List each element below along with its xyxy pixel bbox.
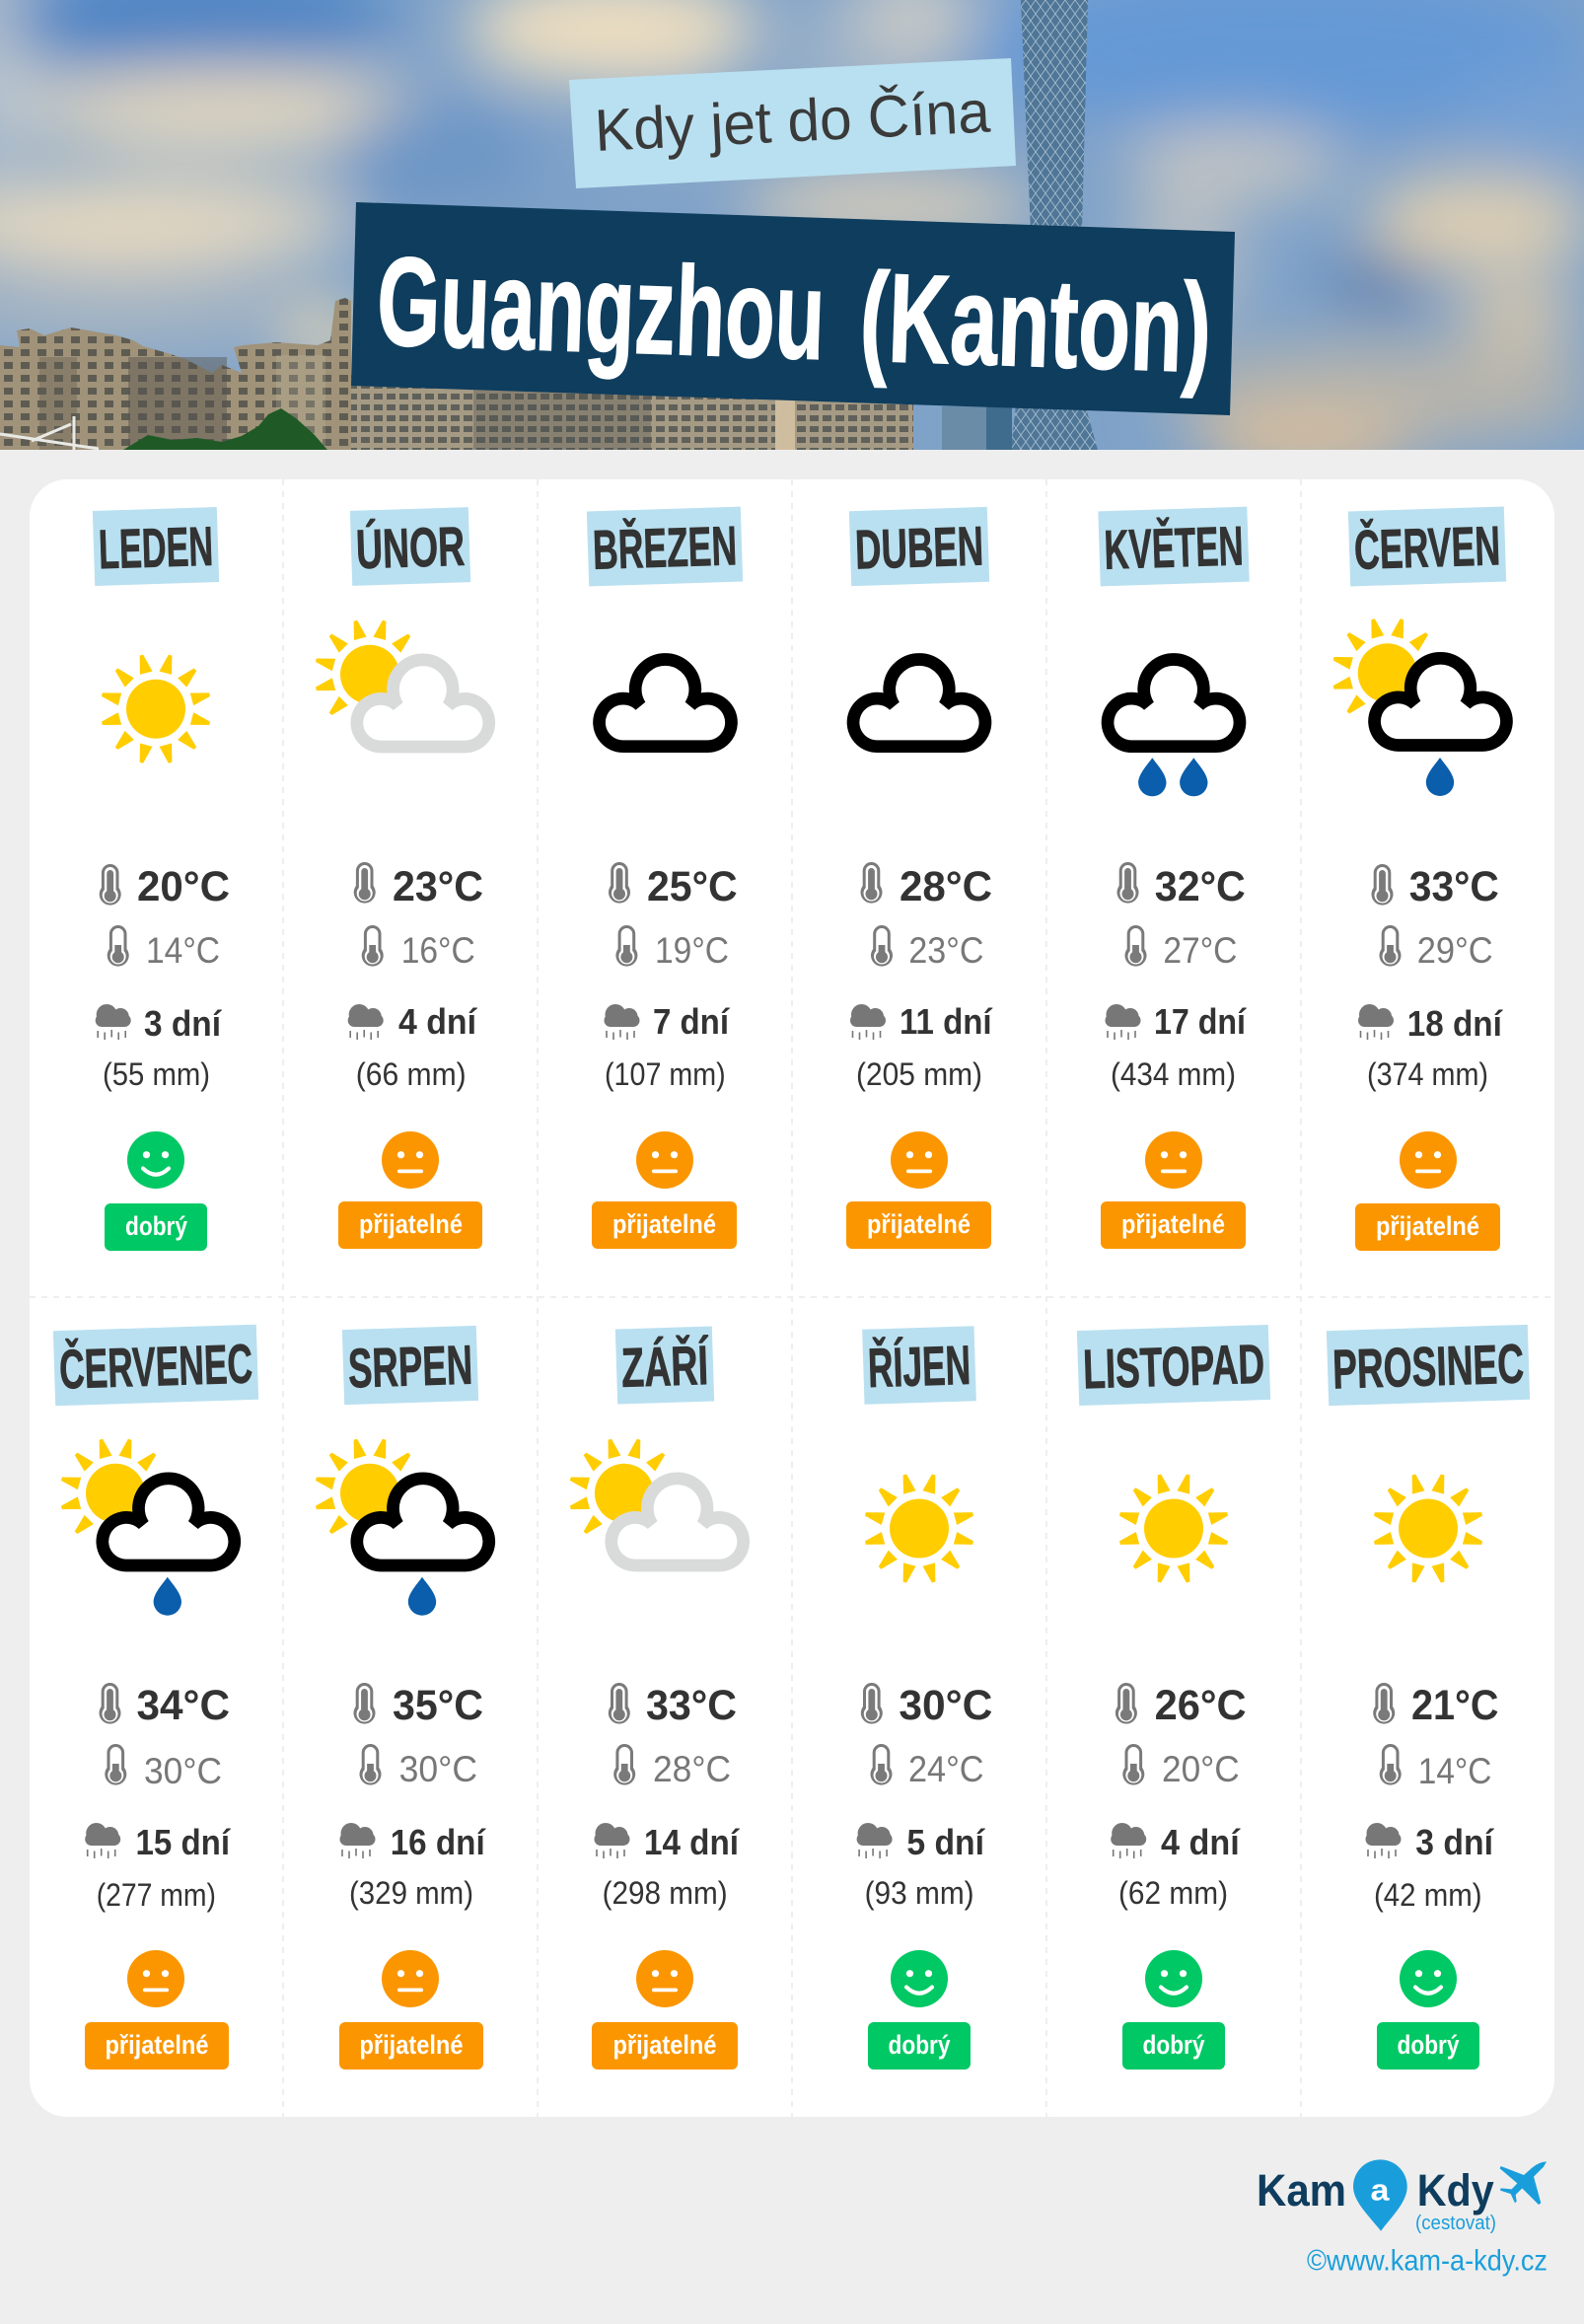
badge: přijatelné: přijatelné <box>359 1209 463 1239</box>
icon: sun, black cloud and drop <box>60 1438 235 1616</box>
heading: LEDEN <box>93 507 219 586</box>
icon: sun <box>101 653 211 764</box>
icon: sun <box>1118 1473 1229 1584</box>
rain days: 7 dní <box>653 1001 730 1042</box>
panel: listopad <box>1077 1325 1270 2070</box>
rainfall: (42 mm) <box>1374 1877 1481 1913</box>
rainfall: (66 mm) <box>356 1056 467 1092</box>
low temperature <box>615 925 729 971</box>
high temperature: 21°C <box>1411 1682 1498 1729</box>
panel: červenec <box>53 1325 258 2070</box>
subtitle: Kdy jet do Čína: Kdy jet do Čína <box>593 78 992 164</box>
rainfall: (298 mm) <box>603 1875 728 1911</box>
low temperature <box>1122 1744 1240 1789</box>
badge: dobrý <box>105 1203 207 1251</box>
badge: dobrý <box>868 2022 971 2070</box>
icon: smiley neutral <box>382 1131 439 1189</box>
high temperature: 33°C <box>1409 863 1499 910</box>
rain days <box>1365 1822 1494 1862</box>
badge: dobrý: dobrý <box>1397 2030 1460 2060</box>
icon: black cloud with two drops <box>1108 660 1240 796</box>
icon: smiley neutral <box>127 1950 184 2007</box>
high temperature <box>1116 1682 1247 1729</box>
tagline: (cestovat) <box>1415 2213 1496 2234</box>
rain days: 4 dní <box>1161 1822 1241 1862</box>
panel: říjen <box>857 1326 992 2070</box>
low temperature <box>1379 925 1493 971</box>
icon: smiley neutral <box>382 1950 439 2007</box>
low temperature: 14°C <box>146 930 220 971</box>
low temperature: 24°C <box>908 1749 984 1789</box>
icon: smiley good <box>127 1131 184 1189</box>
rain days <box>1358 1003 1503 1044</box>
rain days <box>857 1822 985 1862</box>
badge: přijatelné <box>1101 1201 1246 1249</box>
heading: ČERVENEC <box>53 1325 258 1406</box>
heading: ČERVEN <box>1348 507 1506 586</box>
badge: přijatelné <box>85 2022 229 2070</box>
panel: leden <box>93 507 230 1251</box>
rain days: 17 dní <box>1154 1001 1247 1042</box>
badge: přijatelné <box>592 2022 738 2070</box>
low temperature: 30°C <box>144 1751 222 1791</box>
high temperature <box>353 1682 483 1729</box>
heading: LISTOPAD <box>1077 1325 1270 1406</box>
icon: map pin <box>1353 2159 1407 2231</box>
rainfall: (62 mm) <box>1118 1875 1228 1911</box>
tower <box>1021 0 1088 232</box>
rain days: 5 dní <box>906 1822 985 1862</box>
panel: březen <box>587 507 743 1249</box>
heading: SRPEN <box>342 1326 478 1405</box>
high temperature <box>1371 863 1499 910</box>
poles <box>0 416 99 450</box>
icon: smiley good <box>1145 1950 1202 2007</box>
icon: sun, black cloud and drop <box>315 1438 489 1616</box>
panel: srpen <box>315 1326 489 2070</box>
rain days <box>339 1822 486 1862</box>
rain days <box>348 1001 477 1042</box>
rain days <box>594 1822 740 1862</box>
icon: smiley neutral <box>636 1131 693 1189</box>
heading: PROSINEC <box>1327 1325 1530 1406</box>
low temperature: 14°C <box>1418 1751 1491 1791</box>
low temperature <box>108 925 220 971</box>
heading: SRPEN: SRPEN <box>347 1334 473 1399</box>
title: Guangzhou (Kanton): Guangzhou <box>375 231 828 387</box>
heading: ČERVENEC: ČERVENEC <box>58 1332 253 1401</box>
high temperature: 20°C <box>137 863 230 910</box>
icon: smiley neutral <box>891 1131 948 1189</box>
icon: sun, black cloud and drop <box>1332 617 1506 796</box>
wordmark: Kdy: Kdy <box>1417 2165 1494 2215</box>
rainfall: (107 mm) <box>605 1056 726 1092</box>
badge: přijatelné: přijatelné <box>867 1209 971 1239</box>
heading: BŘEZEN: BŘEZEN <box>592 514 738 581</box>
panel: září <box>569 1326 744 2070</box>
heading: LISTOPAD: LISTOPAD <box>1082 1333 1265 1400</box>
panel: únor <box>315 507 489 1249</box>
trees <box>123 408 327 450</box>
low temperature: 29°C <box>1417 930 1493 971</box>
panel: duben <box>846 507 993 1249</box>
badge: přijatelné: přijatelné <box>612 1209 716 1239</box>
high temperature <box>100 863 230 910</box>
rain days <box>604 1001 730 1042</box>
low temperature <box>362 925 475 971</box>
rain days <box>850 1001 993 1042</box>
low temperature: 30°C <box>399 1749 477 1789</box>
high temperature <box>1373 1682 1498 1729</box>
panel: červen <box>1332 507 1506 1251</box>
rain days: 3 dní <box>144 1003 222 1044</box>
high temperature: 35°C <box>393 1682 483 1729</box>
badge: přijatelné: přijatelné <box>1376 1211 1479 1241</box>
logo: Kam a Kdy: Kam <box>1257 2165 1346 2215</box>
heading: DUBEN <box>849 507 989 586</box>
high temperature: 25°C <box>647 863 738 910</box>
rain days: 3 dní <box>1415 1822 1494 1862</box>
badge: přijatelné: přijatelné <box>359 2030 464 2060</box>
high temperature: 32°C <box>1155 863 1246 910</box>
title: Guangzhou (Kanton): (Kanton) <box>858 247 1213 399</box>
high temperature: 30°C <box>899 1682 992 1729</box>
icon: sun <box>864 1473 974 1584</box>
heading: KVĚTEN: KVĚTEN <box>1104 514 1244 581</box>
icon: smiley good <box>1400 1950 1457 2007</box>
badge: přijatelné <box>592 1201 737 1249</box>
rain days: 15 dní <box>136 1822 231 1862</box>
heading: ÚNOR: ÚNOR <box>355 515 466 580</box>
rainfall: (205 mm) <box>856 1056 982 1092</box>
icon: smiley neutral <box>636 1950 693 2007</box>
icon: sun and grey cloud <box>315 619 489 747</box>
badge: přijatelné <box>1355 1203 1500 1251</box>
badge: přijatelné: přijatelné <box>613 2030 716 2060</box>
heading: DUBEN: DUBEN <box>854 514 984 581</box>
icon: smiley good <box>891 1950 948 2007</box>
low temperature <box>870 1744 984 1789</box>
badge: přijatelné <box>846 1201 991 1249</box>
heading: ŘÍJEN: ŘÍJEN <box>867 1334 972 1399</box>
icon: smiley neutral <box>1145 1131 1202 1189</box>
low temperature <box>1124 925 1237 971</box>
panel: calendar card <box>30 479 1554 2117</box>
source: website: ©www.kam-a-kdy.cz <box>1307 2245 1548 2278</box>
high temperature <box>609 1682 737 1729</box>
icon: map pin: a <box>1371 2173 1390 2208</box>
rain days: 14 dní <box>644 1822 740 1862</box>
badge: dobrý: dobrý <box>125 1211 187 1241</box>
badge: dobrý: dobrý <box>888 2030 951 2060</box>
rain days <box>85 1822 231 1862</box>
heading: ZÁŘÍ: ZÁŘÍ <box>620 1334 710 1399</box>
rain days: 18 dní <box>1407 1003 1503 1044</box>
low temperature: 23°C <box>908 930 983 971</box>
panel: prosinec <box>1327 1325 1530 2070</box>
rainfall: (93 mm) <box>865 1875 974 1911</box>
rainfall: (277 mm) <box>97 1877 216 1913</box>
low temperature: 27°C <box>1163 930 1237 971</box>
low temperature <box>613 1744 731 1789</box>
high temperature: 28°C <box>900 863 992 910</box>
high temperature <box>609 862 738 910</box>
icon: sun <box>1373 1473 1483 1584</box>
buildings <box>0 298 351 450</box>
rain days <box>1105 1001 1247 1042</box>
heading: ÚNOR <box>350 507 470 586</box>
rainfall: (55 mm) <box>103 1056 210 1092</box>
panel: květen <box>1098 507 1250 1249</box>
rainfall: (329 mm) <box>349 1875 473 1911</box>
high temperature: 33°C <box>646 1682 737 1729</box>
rain days <box>96 1003 222 1044</box>
low temperature <box>1380 1744 1491 1791</box>
badge: dobrý <box>1122 2022 1225 2070</box>
badge: dobrý: dobrý <box>1142 2030 1205 2060</box>
icon: sun and grey cloud <box>569 1438 744 1565</box>
rainfall: (374 mm) <box>1367 1056 1488 1092</box>
heading: LEDEN: LEDEN <box>98 515 214 580</box>
low temperature <box>359 1744 477 1789</box>
high temperature <box>860 862 992 910</box>
icon: black cloud <box>853 660 985 747</box>
icon: smiley neutral <box>1400 1131 1457 1189</box>
hero photo: sky and Guangzhou skyline <box>0 0 1584 470</box>
rainfall: (434 mm) <box>1111 1056 1236 1092</box>
high temperature <box>354 862 483 910</box>
heading: KVĚTEN <box>1098 507 1250 586</box>
heading: ČERVEN: ČERVEN <box>1353 514 1501 581</box>
logo: Kam a Kdy <box>1257 2159 1547 2234</box>
badge: přijatelné <box>339 2022 483 2070</box>
icon: airplane <box>1500 2161 1547 2205</box>
heading: ŘÍJEN <box>862 1326 976 1405</box>
high temperature: 34°C <box>136 1682 230 1729</box>
low temperature: 28°C <box>653 1749 731 1789</box>
high temperature: 26°C <box>1155 1682 1247 1729</box>
badge: přijatelné: přijatelné <box>1121 1209 1225 1239</box>
low temperature <box>871 925 983 971</box>
low temperature: 16°C <box>401 930 475 971</box>
rain days: 11 dní <box>900 1001 993 1042</box>
rain days: 4 dní <box>398 1001 477 1042</box>
low temperature: 20°C <box>1162 1749 1240 1789</box>
heading: BŘEZEN <box>587 507 743 586</box>
title: Guangzhou (Kanton) <box>351 202 1235 415</box>
badge: dobrý <box>1377 2022 1479 2070</box>
heading: ZÁŘÍ <box>615 1326 714 1405</box>
subtitle: Kdy jet do Čína <box>569 58 1016 188</box>
badge: přijatelné: přijatelné <box>105 2030 209 2060</box>
high temperature: 23°C <box>393 863 483 910</box>
icon: black cloud <box>600 660 731 747</box>
rain days: 16 dní <box>391 1822 486 1862</box>
badge: přijatelné <box>338 1201 482 1249</box>
high temperature <box>1116 862 1246 910</box>
low temperature <box>105 1744 222 1791</box>
rain days <box>1111 1822 1241 1862</box>
low temperature: 19°C <box>655 930 729 971</box>
